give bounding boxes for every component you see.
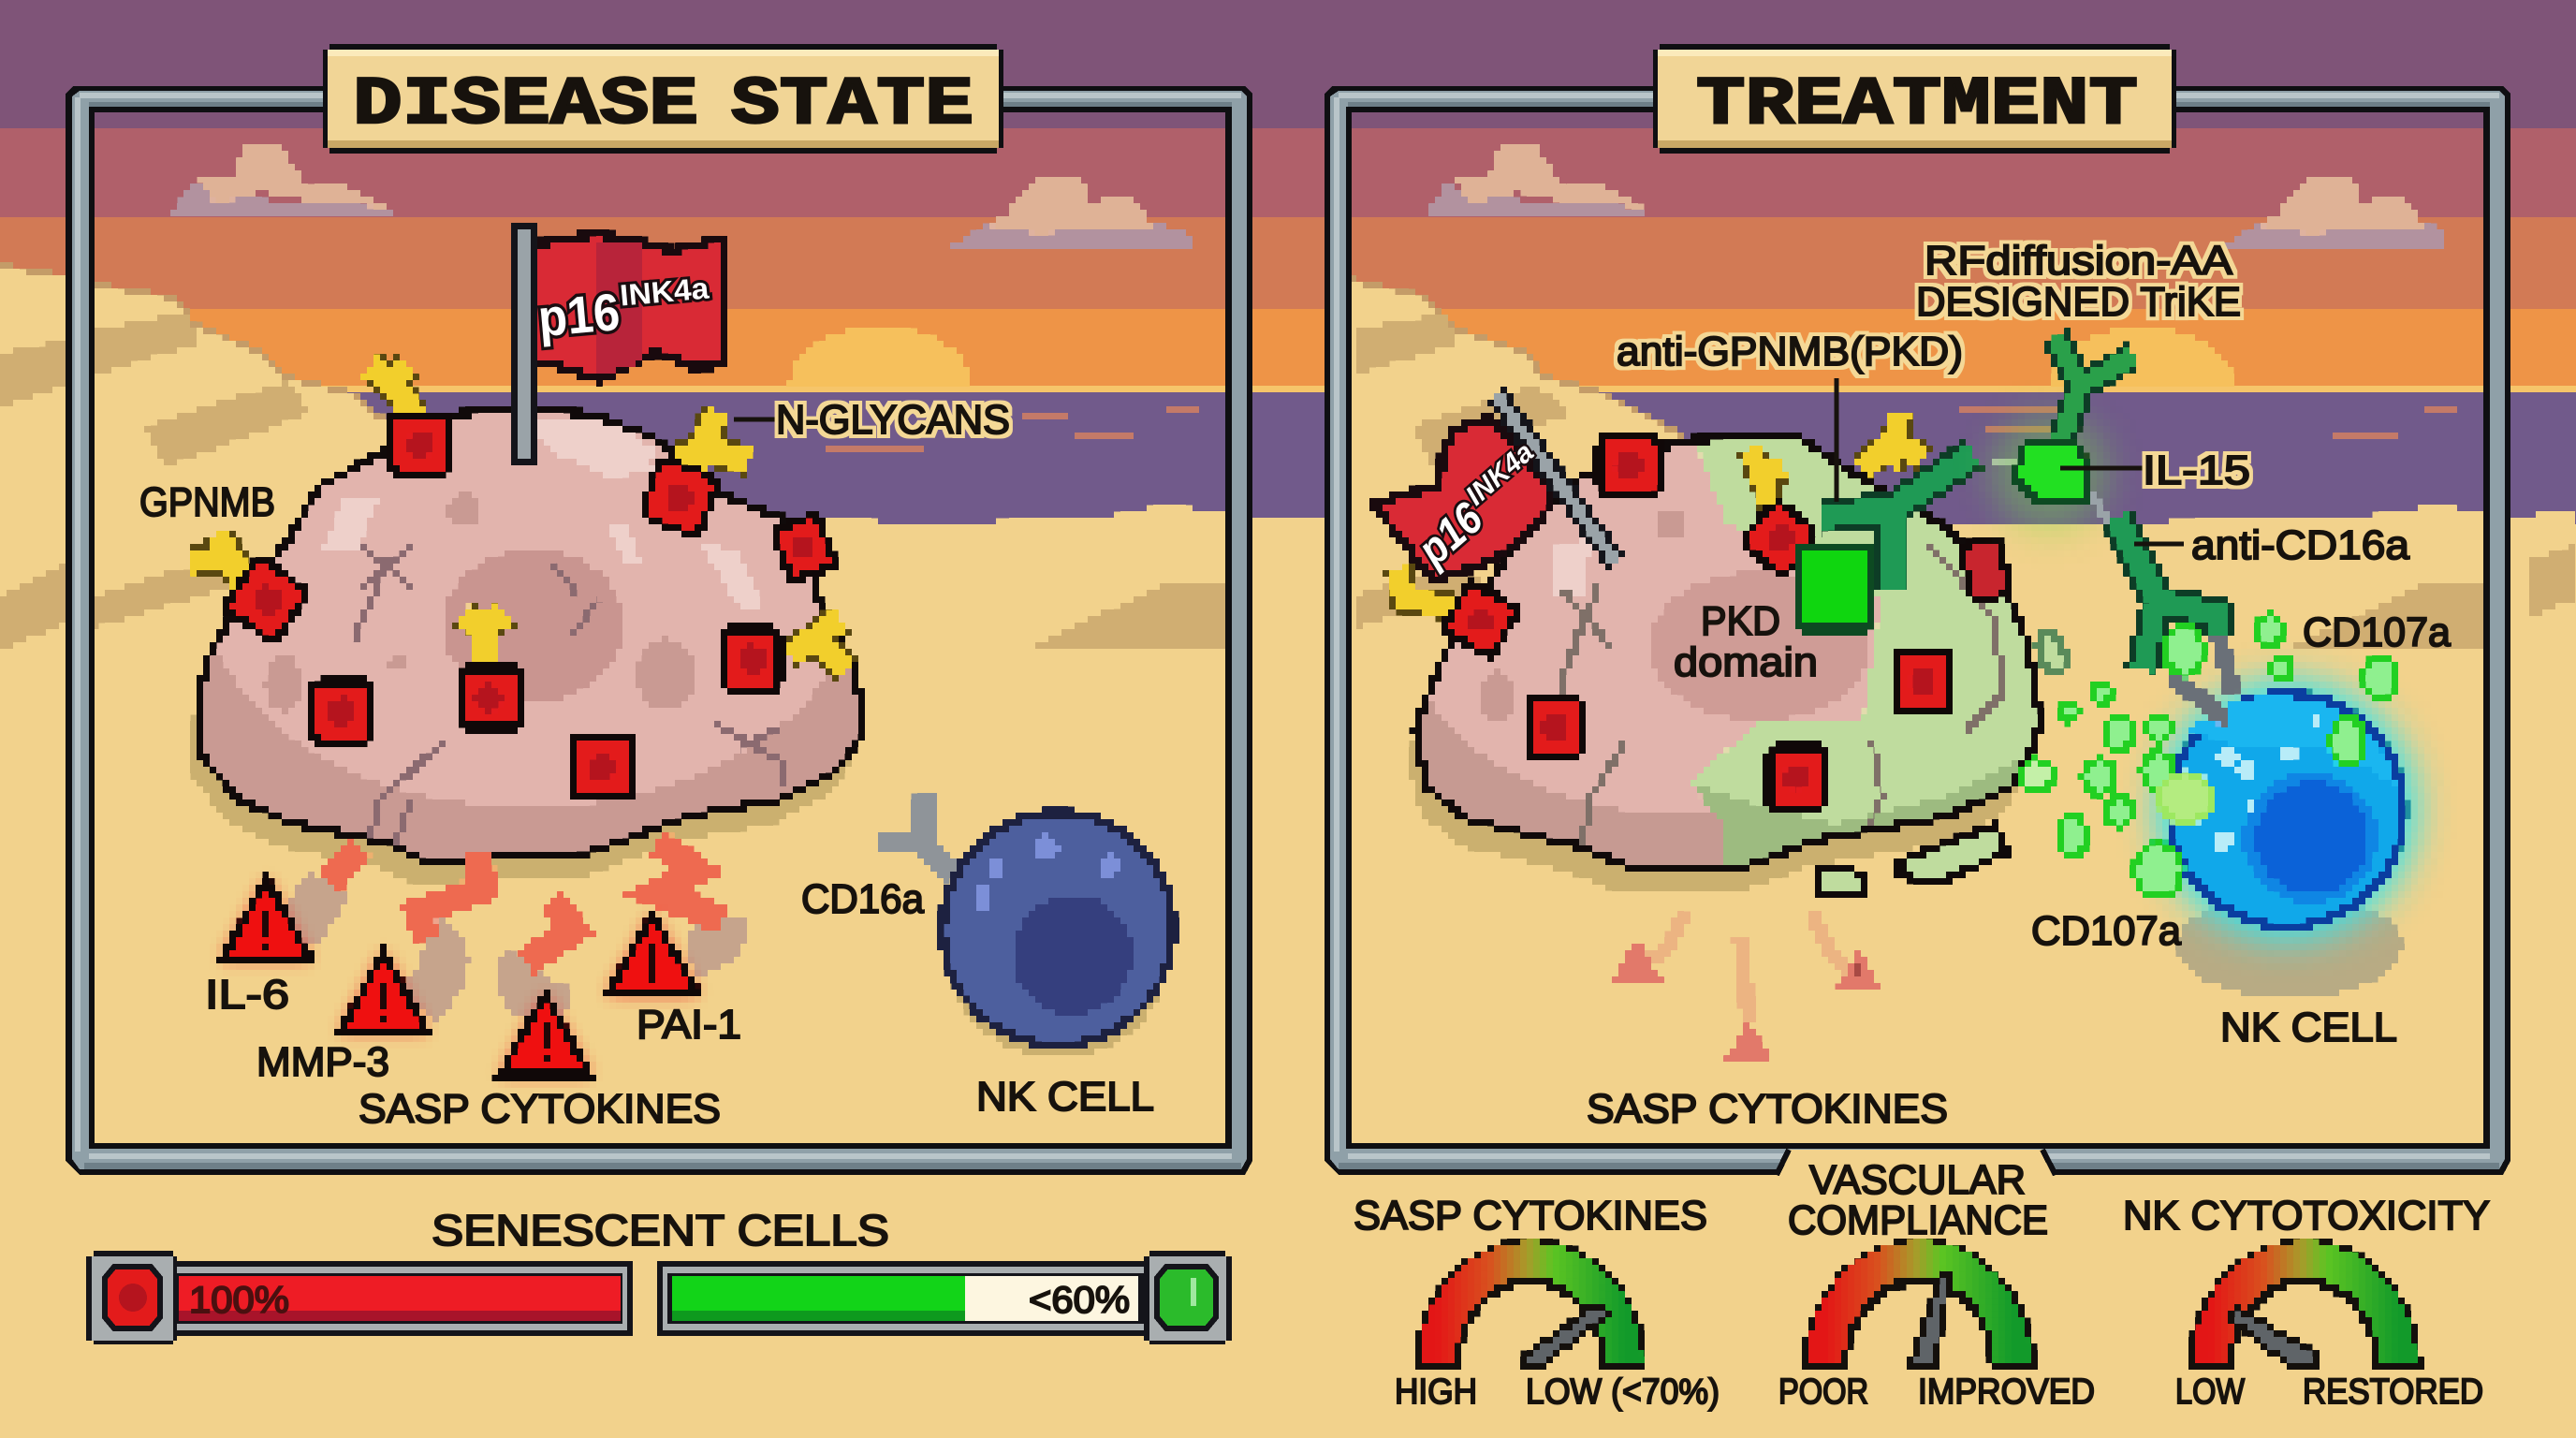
gauges (1437, 1259, 2398, 1369)
SASP smoke wisps (296, 843, 723, 1012)
water reflections (824, 404, 2457, 450)
label: PAI-1: PAI-1 (637, 1002, 741, 1048)
gauge labels: SASP cytokines: SASP CYTOKINES (1354, 1193, 1707, 1239)
label: CD107a upper: CD107a (2303, 609, 2452, 655)
NK cell, activated (2170, 694, 2404, 926)
flag text: treatment: INK4a (1460, 436, 1540, 511)
label: PKD domain (1674, 598, 1818, 685)
IL-15 block with upper Y arm (1992, 337, 2134, 531)
gauge scale: NK, low to restored: RESTORED (2303, 1372, 2483, 1412)
label: anti-CD16a: anti-CD16a (2191, 522, 2410, 568)
title plate: disease state: DISEASE (353, 66, 698, 143)
label: CD16a: CD16a (801, 876, 925, 922)
label: SASP cytokines, disease: SASP CYTOKINES (359, 1086, 721, 1132)
label: N-GLYCANS: N-GLYCANS (776, 397, 1010, 443)
progress bar: disease 100%: 100% (189, 1280, 289, 1321)
gauge scale: vascular, poor to improved: IMPROVED (1918, 1372, 2095, 1412)
gauge labels: NK cytotoxicity: NK CYTOTOXICITY (2123, 1193, 2490, 1239)
gauge: NK cytotoxicity (2211, 1259, 2398, 1369)
flag text: disease state: INK4a (619, 271, 710, 313)
dune left (0, 266, 1232, 651)
NK cell, inactive (879, 795, 1173, 1058)
heading: senescent cells: SENESCENT CELLS (432, 1206, 889, 1255)
anti-CD16a arm with gray CD16a receptor (2089, 495, 2232, 721)
faded SASP wisps and triangles (1613, 913, 1883, 1064)
flag text: disease state: p16 (535, 282, 622, 347)
title plate: treatment (1653, 44, 2176, 154)
gauge labels: vascular compliance: VASCULAR (1809, 1157, 2026, 1203)
label: anti-GPNMB(PKD): anti-GPNMB(PKD) (1617, 329, 1963, 374)
gauge scale: vascular, poor to improved (1778, 1372, 2095, 1412)
gauge: vascular compliance (1825, 1259, 2012, 1369)
gauge labels: vascular compliance (1788, 1157, 2048, 1243)
label: GPNMB: GPNMB (139, 479, 275, 525)
label leader lines (734, 378, 2184, 544)
treated senescent cell body (1404, 421, 2041, 871)
progress bar: treatment under 60% (657, 1251, 1232, 1344)
label: CD107a lower: CD107a (2031, 908, 2182, 954)
progress bar: disease 100% (86, 1251, 633, 1344)
sun, left panel (789, 327, 973, 386)
panel frame: disease state (66, 86, 1252, 1175)
senescent cell shadow (190, 433, 855, 886)
NK cell shadow and glow (2158, 681, 2416, 998)
clouds left panel (168, 145, 1191, 251)
flag text: disease state (535, 271, 712, 347)
label: RFdiffusion-AA designed TriKE: RFdiffusion-AA (1925, 238, 2233, 284)
gauge scale: NK, low to restored (2175, 1372, 2483, 1412)
gauge: SASP cytokines (1437, 1259, 1624, 1369)
label: RFdiffusion-AA designed TriKE (1916, 238, 2241, 325)
label: RFdiffusion-AA designed TriKE: DESIGNED TriKE (1916, 279, 2241, 325)
cell fragments (1818, 630, 2071, 894)
gauge scale: SASP, high to low: LOW (<70%) (1526, 1372, 1720, 1412)
illustration: disease state panel (190, 228, 1173, 1075)
label: MMP-3: MMP-3 (256, 1039, 389, 1085)
dune right (1348, 279, 2576, 646)
lower sand (0, 505, 2576, 1438)
illustration: treatment panel (1374, 337, 2416, 1064)
gauge labels: vascular compliance: COMPLIANCE (1788, 1197, 2048, 1243)
flag pole and p16 flag (513, 228, 723, 464)
receptors and glycans on treated cell (1398, 412, 2012, 807)
gauge scale: vascular, poor to improved: POOR (1778, 1372, 1868, 1412)
CD107a vesicles (2021, 615, 2396, 897)
senescent cell body (198, 373, 862, 861)
clouds right panel (1424, 145, 2446, 251)
GPNMB receptors with N-glycans (192, 367, 846, 799)
label: SASP cytokines, treatment: SASP CYTOKINES (1587, 1086, 1948, 1132)
panel frame: treatment (1325, 86, 2510, 1178)
p16 flag, toppled (1374, 394, 1617, 580)
gauge scale: NK, low to restored: LOW (2175, 1372, 2245, 1412)
warning triangles (222, 880, 698, 1075)
label: PKD domain: domain (1674, 639, 1818, 685)
label: NK cell, disease: NK CELL (976, 1074, 1154, 1120)
label: IL-15: IL-15 (2143, 448, 2250, 493)
treated cell shadow (1408, 462, 2032, 893)
green TriKE: anti-GPNMB arm and PKD domain (1797, 454, 2019, 629)
label: NK cell, treatment: NK CELL (2220, 1005, 2397, 1050)
label: PKD domain: PKD (1701, 598, 1780, 644)
title plate: disease state (323, 44, 1003, 154)
flag text: treatment: p16 (1408, 493, 1492, 577)
progress bar: treatment under 60%: <60% (1029, 1280, 1130, 1321)
flag text: treatment (1405, 436, 1555, 577)
label: IL-6: IL-6 (205, 972, 289, 1018)
gauge scale: SASP, high to low: HIGH (1395, 1372, 1477, 1412)
gauge scale: SASP, high to low (1395, 1372, 1720, 1412)
title plate: disease state: STATE (731, 66, 973, 143)
sun, right panel (2051, 327, 2234, 386)
title plate: treatment: TREATMENT (1696, 66, 2138, 143)
